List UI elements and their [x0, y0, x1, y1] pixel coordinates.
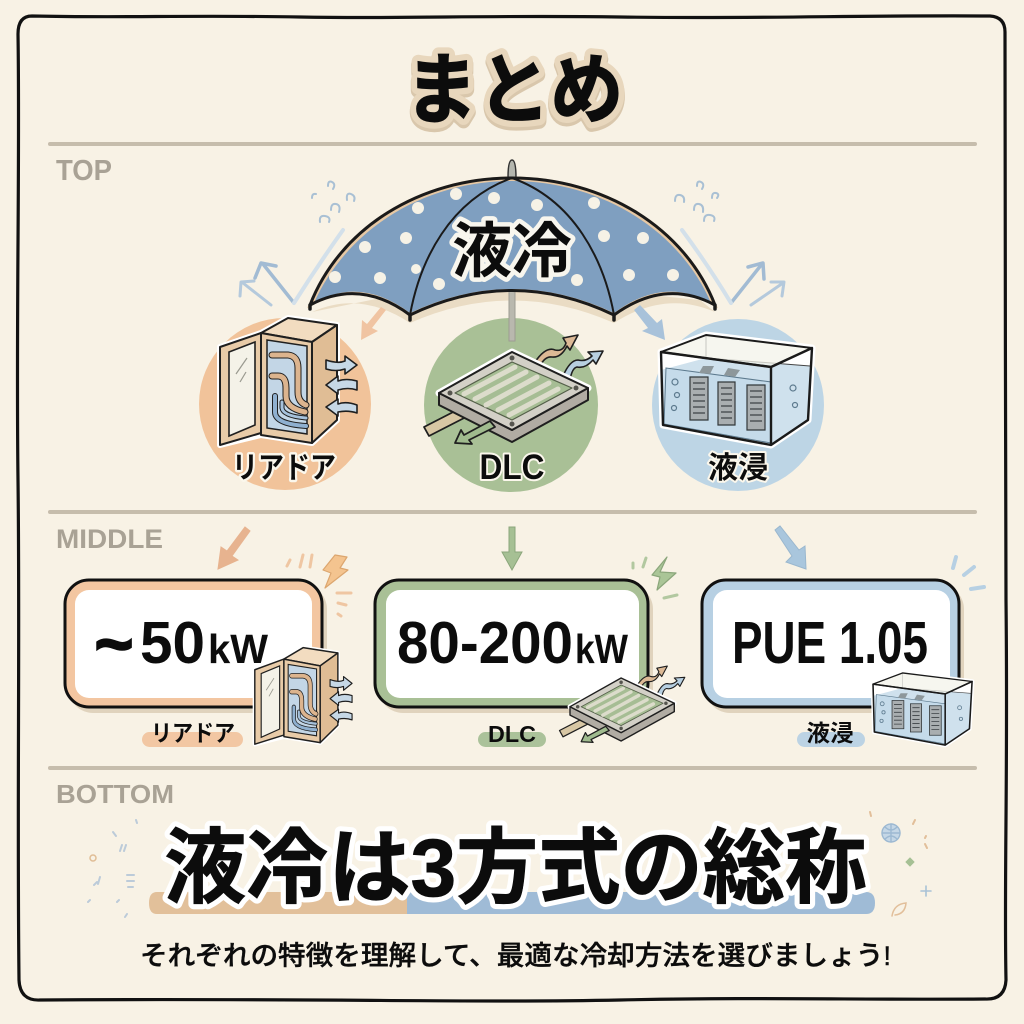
icon: globe [882, 824, 900, 842]
pill label: immersion: 液浸 [806, 720, 854, 746]
label: rear door: リアドア [232, 452, 336, 485]
card: rear door [65, 580, 327, 713]
card: immersion [702, 580, 964, 713]
section label: TOP: TOP [56, 155, 112, 187]
pill label: rear door: リアドア [151, 720, 235, 746]
card value: kW [575, 626, 628, 672]
energy bolt, orange [287, 555, 351, 616]
section label: BOTTOM: BOTTOM [56, 779, 174, 809]
card value: 50 [140, 610, 205, 676]
arrow: to DLC card [502, 527, 522, 570]
highlight band [149, 892, 875, 914]
card value: ~ [95, 610, 133, 679]
pill label: DLC [478, 721, 546, 747]
arrows fanning from the umbrella, left [240, 182, 355, 305]
arrow: umbrella to immersion [634, 305, 665, 340]
arrow: to rear door card [218, 527, 250, 569]
circle: DLC [424, 318, 598, 492]
icon: immersion tank [661, 335, 812, 445]
umbrella label: 液冷 [452, 218, 572, 285]
headline: 液冷は3方式の総称 [164, 823, 867, 914]
umbrella: 液冷 [310, 160, 715, 341]
circle: immersion [652, 319, 824, 491]
closing sentence: それぞれの特徴を理解して、最適な冷却方法を選びましょう! [140, 941, 891, 971]
icon: cold plate [424, 335, 603, 444]
sparkle ticks, blue [953, 557, 984, 589]
title: まとめ [405, 48, 623, 134]
label: immersion: 液浸 [708, 452, 768, 485]
pill label: DLC: DLC [488, 721, 536, 747]
arrows fanning from the umbrella, right [675, 182, 784, 305]
mini icon: rear door [255, 648, 352, 744]
headline: 液冷は3方式の総称 [164, 823, 867, 914]
pill label: immersion [797, 720, 865, 747]
title: まとめ [405, 48, 623, 134]
mini icon: immersion tank [873, 673, 972, 745]
card value [95, 610, 268, 679]
arrow: to immersion card [775, 526, 806, 569]
section label: MIDDLE: MIDDLE [56, 524, 163, 554]
circle: rear door [199, 318, 371, 490]
arrow: umbrella to rear door [361, 307, 386, 340]
mini icon: cold plate [560, 666, 685, 742]
energy bolt, green [633, 557, 677, 598]
card value: kW [208, 626, 268, 672]
card value: 80-200 [397, 610, 573, 676]
icon: rear door cabinet [220, 318, 357, 445]
decorative doodles, right [870, 812, 931, 916]
card value: PUE 1.05 [732, 610, 928, 676]
decorative doodles, left [88, 820, 137, 917]
title: まとめ [405, 51, 623, 137]
card: DLC [375, 580, 653, 713]
label: DLC: DLC [480, 448, 544, 487]
